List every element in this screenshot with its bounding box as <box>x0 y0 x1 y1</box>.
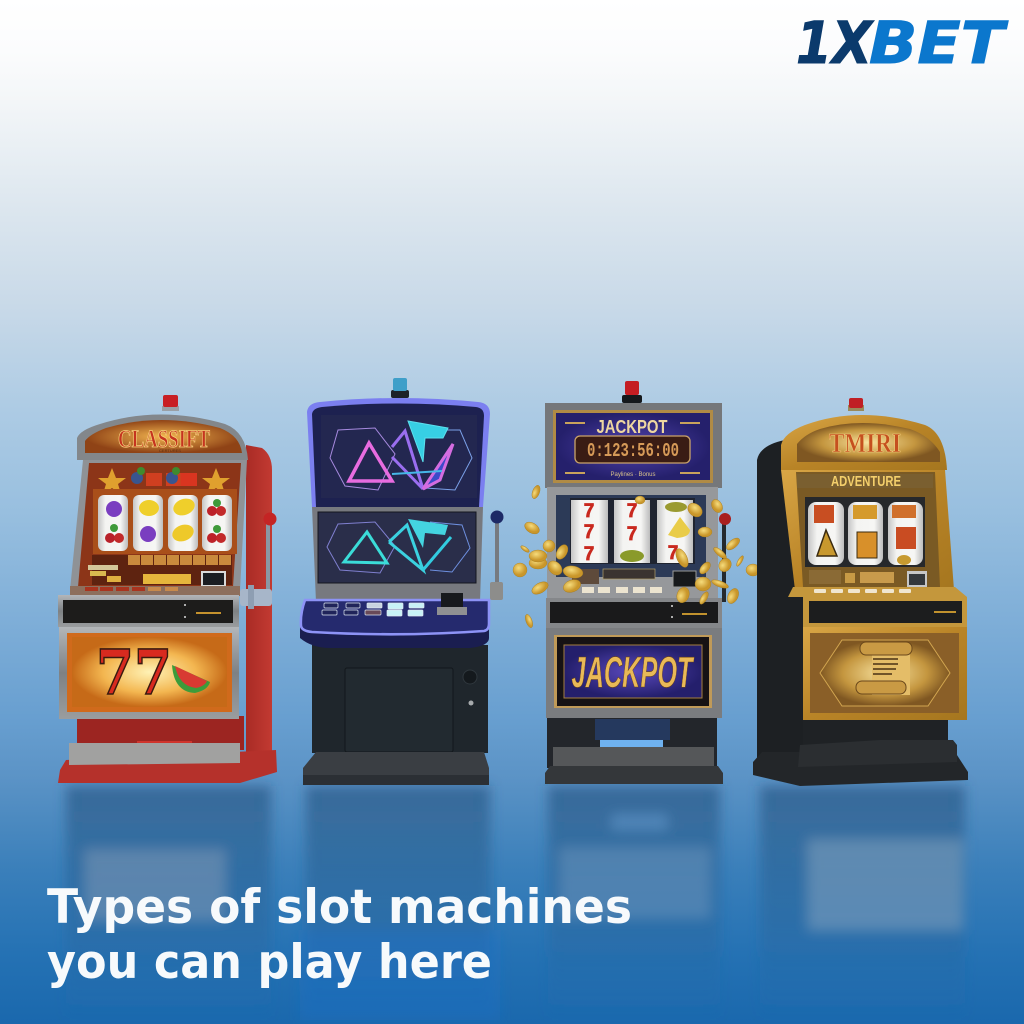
gold ledge <box>788 587 967 597</box>
fruit symbols <box>105 496 226 544</box>
title: you can play here <box>47 935 492 990</box>
reel sevens: 7 <box>584 522 594 543</box>
top jackpot sign <box>545 403 722 488</box>
reel sevens: 7 <box>627 501 637 522</box>
lower jackpot panel: JACKPOT <box>572 648 694 697</box>
lower scroll panel <box>803 627 967 720</box>
lower screen <box>312 507 483 602</box>
arch header: CERTURES <box>159 448 181 453</box>
paytable strip <box>88 555 232 587</box>
logo: 1XBET: BET <box>869 9 1009 77</box>
red lamp <box>848 398 864 411</box>
red side cabinet and foot <box>58 445 277 783</box>
logo: 1XBET <box>796 9 1009 77</box>
lower panel: 77 and watermelon <box>59 627 239 719</box>
title <box>47 880 632 990</box>
red lamp <box>162 395 179 411</box>
reel sevens: 7 <box>584 544 594 565</box>
top jackpot sign: Paylines · Bonus <box>610 472 656 478</box>
blue lamp <box>391 378 409 398</box>
lever <box>240 512 276 609</box>
machine 1: classic fruit slot <box>58 395 277 783</box>
top jackpot sign: 0:123:56:00 <box>587 440 679 462</box>
reel sevens: 7 <box>584 501 594 522</box>
falling gold coins <box>513 484 760 629</box>
gold arch header <box>781 415 947 470</box>
gold band with black strip <box>803 597 967 627</box>
right lever <box>719 513 731 602</box>
button ledge <box>70 586 240 596</box>
lower jackpot panel <box>546 628 722 718</box>
red lamp <box>622 381 642 403</box>
black band <box>546 598 722 628</box>
reel sevens <box>584 501 678 565</box>
top jackpot sign: JACKPOT <box>596 417 668 437</box>
logo: 1XBET: 1X <box>796 9 875 77</box>
tray and foot <box>545 718 723 784</box>
gold arch header: TMIRI <box>829 428 901 458</box>
machine 2: video slot <box>300 378 504 785</box>
arch header <box>77 414 248 460</box>
upper cabinet with reels <box>70 460 247 590</box>
title: Types of slot machines <box>47 880 632 935</box>
upper gold cabinet with reels <box>781 470 954 590</box>
top screen housing <box>307 398 490 507</box>
console with buttons <box>300 593 489 648</box>
black band <box>58 595 239 627</box>
machine 4: adventure themed slot <box>753 398 968 786</box>
upper gold cabinet with reels: ADVENTURE <box>831 473 901 490</box>
reel symbols <box>814 505 916 565</box>
small panel row <box>809 570 927 588</box>
floor reflections <box>66 786 965 1020</box>
reel sevens: 7 <box>627 524 637 545</box>
black side cabinet and foot <box>753 440 968 786</box>
lever <box>490 510 504 600</box>
icon: scroll <box>856 642 912 695</box>
arch header: CLASSIFT <box>118 426 210 453</box>
reel sevens: 7 <box>668 543 678 564</box>
lower panel: 77 and watermelon: 77 <box>96 636 172 709</box>
reel section <box>547 487 718 599</box>
machine 3: progressive jackpot slot <box>513 381 760 784</box>
top screen geometric art <box>330 421 472 490</box>
cabinet base and foot <box>303 645 489 785</box>
